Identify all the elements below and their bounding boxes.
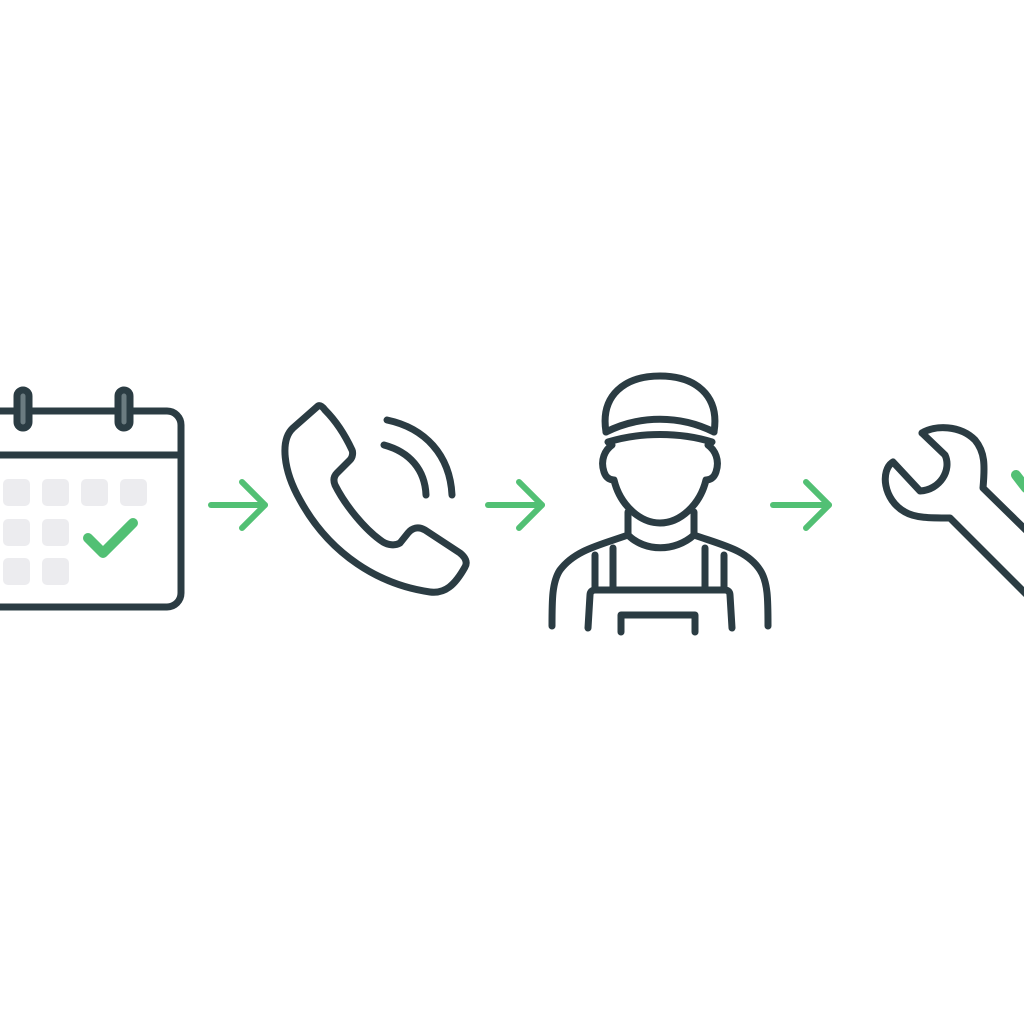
arrow 2: [488, 482, 542, 528]
icon: wrench: [885, 428, 1024, 602]
arrow 1: [211, 482, 265, 528]
icon: phone: [285, 406, 466, 592]
icon: worker: [552, 376, 768, 632]
icon: green check (partial): [1016, 475, 1024, 488]
arrow 3: [773, 482, 829, 528]
icon: calendar: [0, 390, 181, 607]
